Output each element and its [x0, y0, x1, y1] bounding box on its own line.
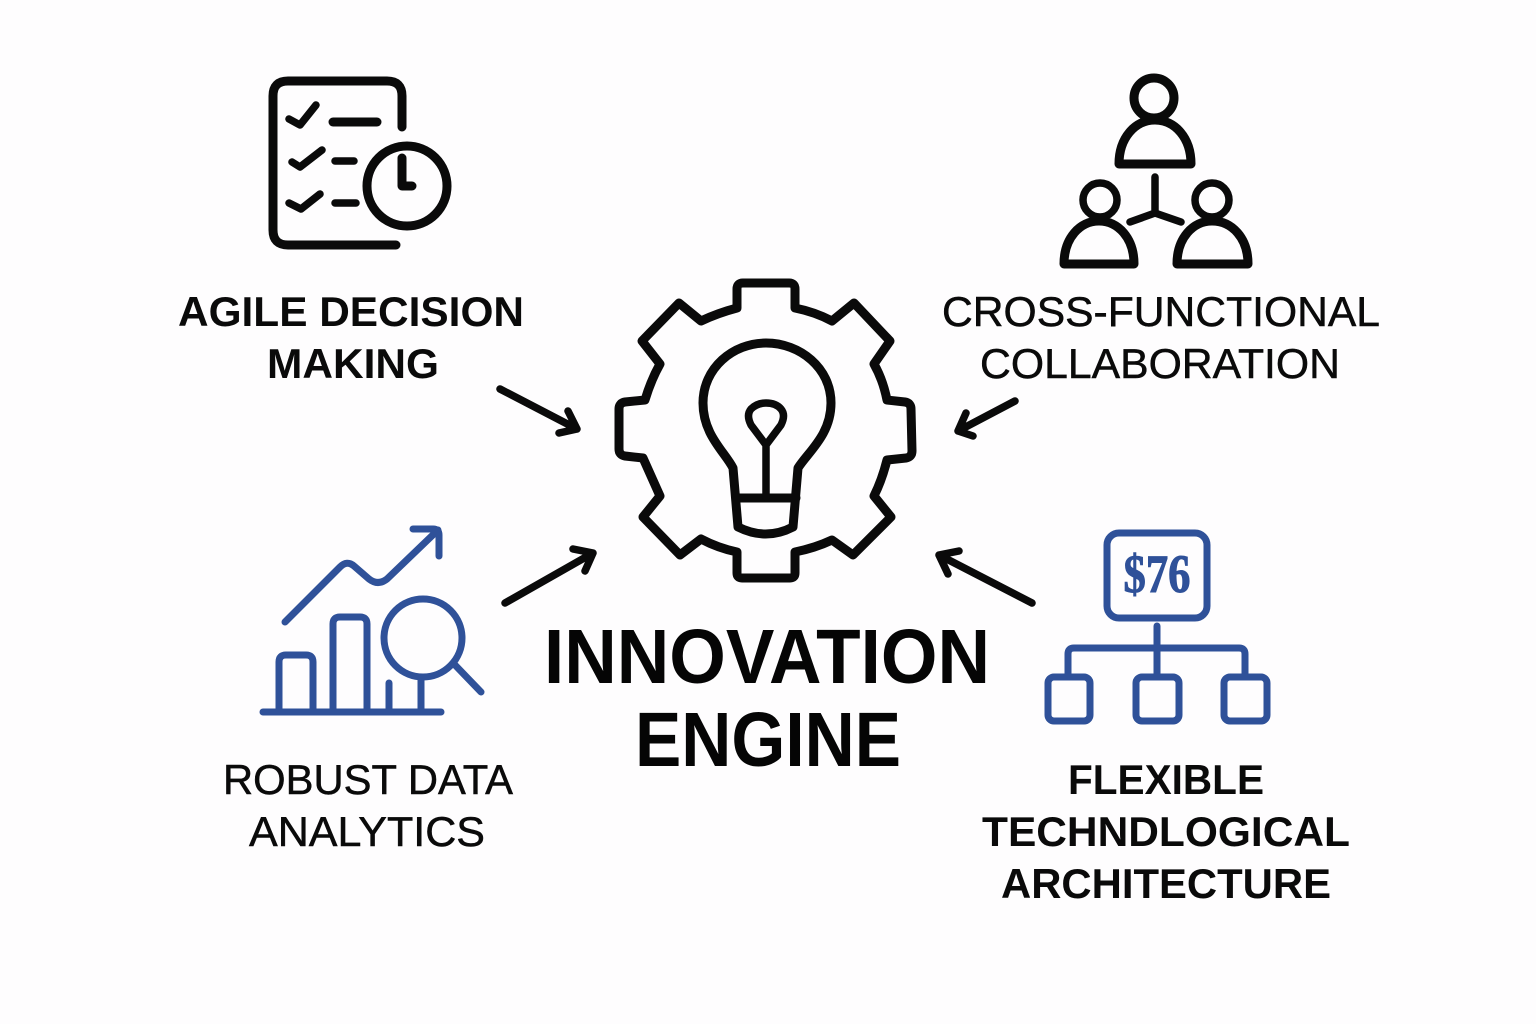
label: robust data analytics: ROBUST DATA: [223, 756, 513, 803]
label: agile decision making: AGILE DECISION: [178, 288, 524, 335]
icon: technology hierarchy: $76: [1124, 544, 1190, 604]
label: cross-functional collaboration: CROSS-FUNCTIONAL: [942, 288, 1380, 335]
label: agile decision making: MAKING: [267, 340, 439, 387]
label: flexible technological architecture: FLEXIBLE: [1068, 756, 1264, 803]
icon: technology hierarchy: [1048, 533, 1267, 721]
arrow: collaboration to center: [958, 401, 1015, 436]
arrow: agile decision making to center: [500, 389, 577, 433]
title: ENGINE: [635, 697, 901, 783]
arrow: technological architecture to center: [939, 551, 1032, 603]
title: [544, 614, 990, 783]
label: robust data analytics: [223, 756, 513, 855]
icon: checklist with clock: [273, 81, 447, 245]
label: robust data analytics: ANALYTICS: [249, 808, 485, 855]
arrow: data analytics to center: [505, 549, 593, 603]
label: agile decision making: [178, 288, 524, 387]
icon: gear with light bulb: [619, 283, 912, 578]
label: cross-functional collaboration: COLLABORATION: [980, 340, 1340, 387]
label: flexible technological architecture: ARCHITECTURE: [1001, 860, 1331, 907]
icon: three connected people: [1064, 78, 1248, 264]
icon: analytics chart with magnifier: [263, 529, 481, 712]
label: cross-functional collaboration: [942, 288, 1380, 387]
label: flexible technological architecture: [982, 756, 1350, 907]
label: flexible technological architecture: TECHNDLOGICAL: [982, 808, 1350, 855]
title: INNOVATION: [544, 614, 990, 700]
